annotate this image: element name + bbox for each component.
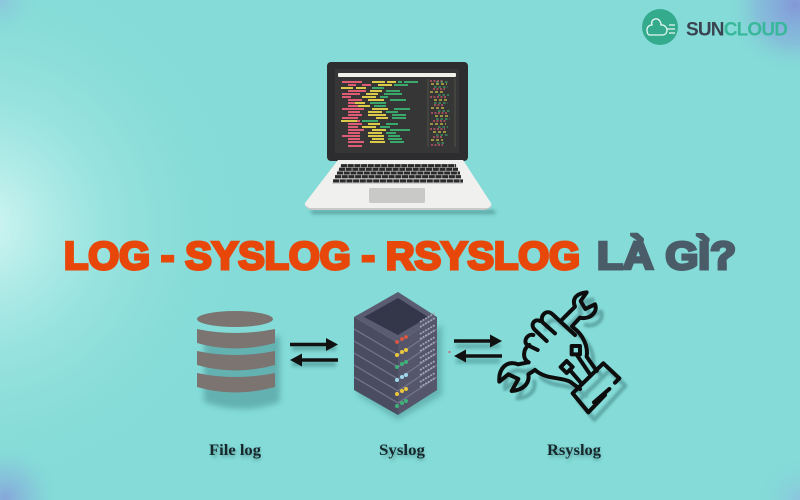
trackpad xyxy=(369,188,425,203)
icon: logo cloud badge xyxy=(642,9,678,45)
server vents xyxy=(420,313,435,387)
logo wordmark: SUNCLOUD xyxy=(686,20,788,40)
database layers xyxy=(197,311,275,392)
label: File log: File log xyxy=(209,442,261,459)
server right side xyxy=(398,317,437,415)
server slot lines xyxy=(354,329,437,403)
icon: server rack xyxy=(354,292,442,420)
arrows: file log to syslog xyxy=(290,338,338,366)
label: Syslog: Syslog xyxy=(382,444,424,461)
logo: Suncloud xyxy=(642,9,788,45)
label: File log: File log xyxy=(212,444,261,461)
database shadow xyxy=(204,336,280,409)
server left side xyxy=(354,317,398,415)
laptop base xyxy=(305,160,491,208)
laptop lid xyxy=(327,62,468,161)
hand icon shadow xyxy=(505,300,625,420)
laptop screen xyxy=(335,69,459,153)
label: Rsyslog: Rsyslog xyxy=(550,444,601,461)
icon: hand holding wrench xyxy=(499,292,625,420)
hand icon outline xyxy=(499,292,619,412)
title dark part: LÀ GÌ? xyxy=(597,234,736,278)
label: Rsyslog: Rsyslog xyxy=(547,442,601,459)
keyboard xyxy=(332,164,463,184)
label: Syslog: Syslog xyxy=(379,442,425,459)
laptop shadow xyxy=(310,210,496,214)
server status lights xyxy=(395,335,408,408)
icon: laptop xyxy=(305,62,496,214)
title orange part: LOG - SYSLOG - RSYSLOG xyxy=(64,235,580,278)
title xyxy=(64,234,736,278)
server shadow xyxy=(358,325,442,420)
arrows: syslog to rsyslog xyxy=(448,334,502,362)
icon: database xyxy=(197,311,280,409)
server top xyxy=(354,292,437,343)
